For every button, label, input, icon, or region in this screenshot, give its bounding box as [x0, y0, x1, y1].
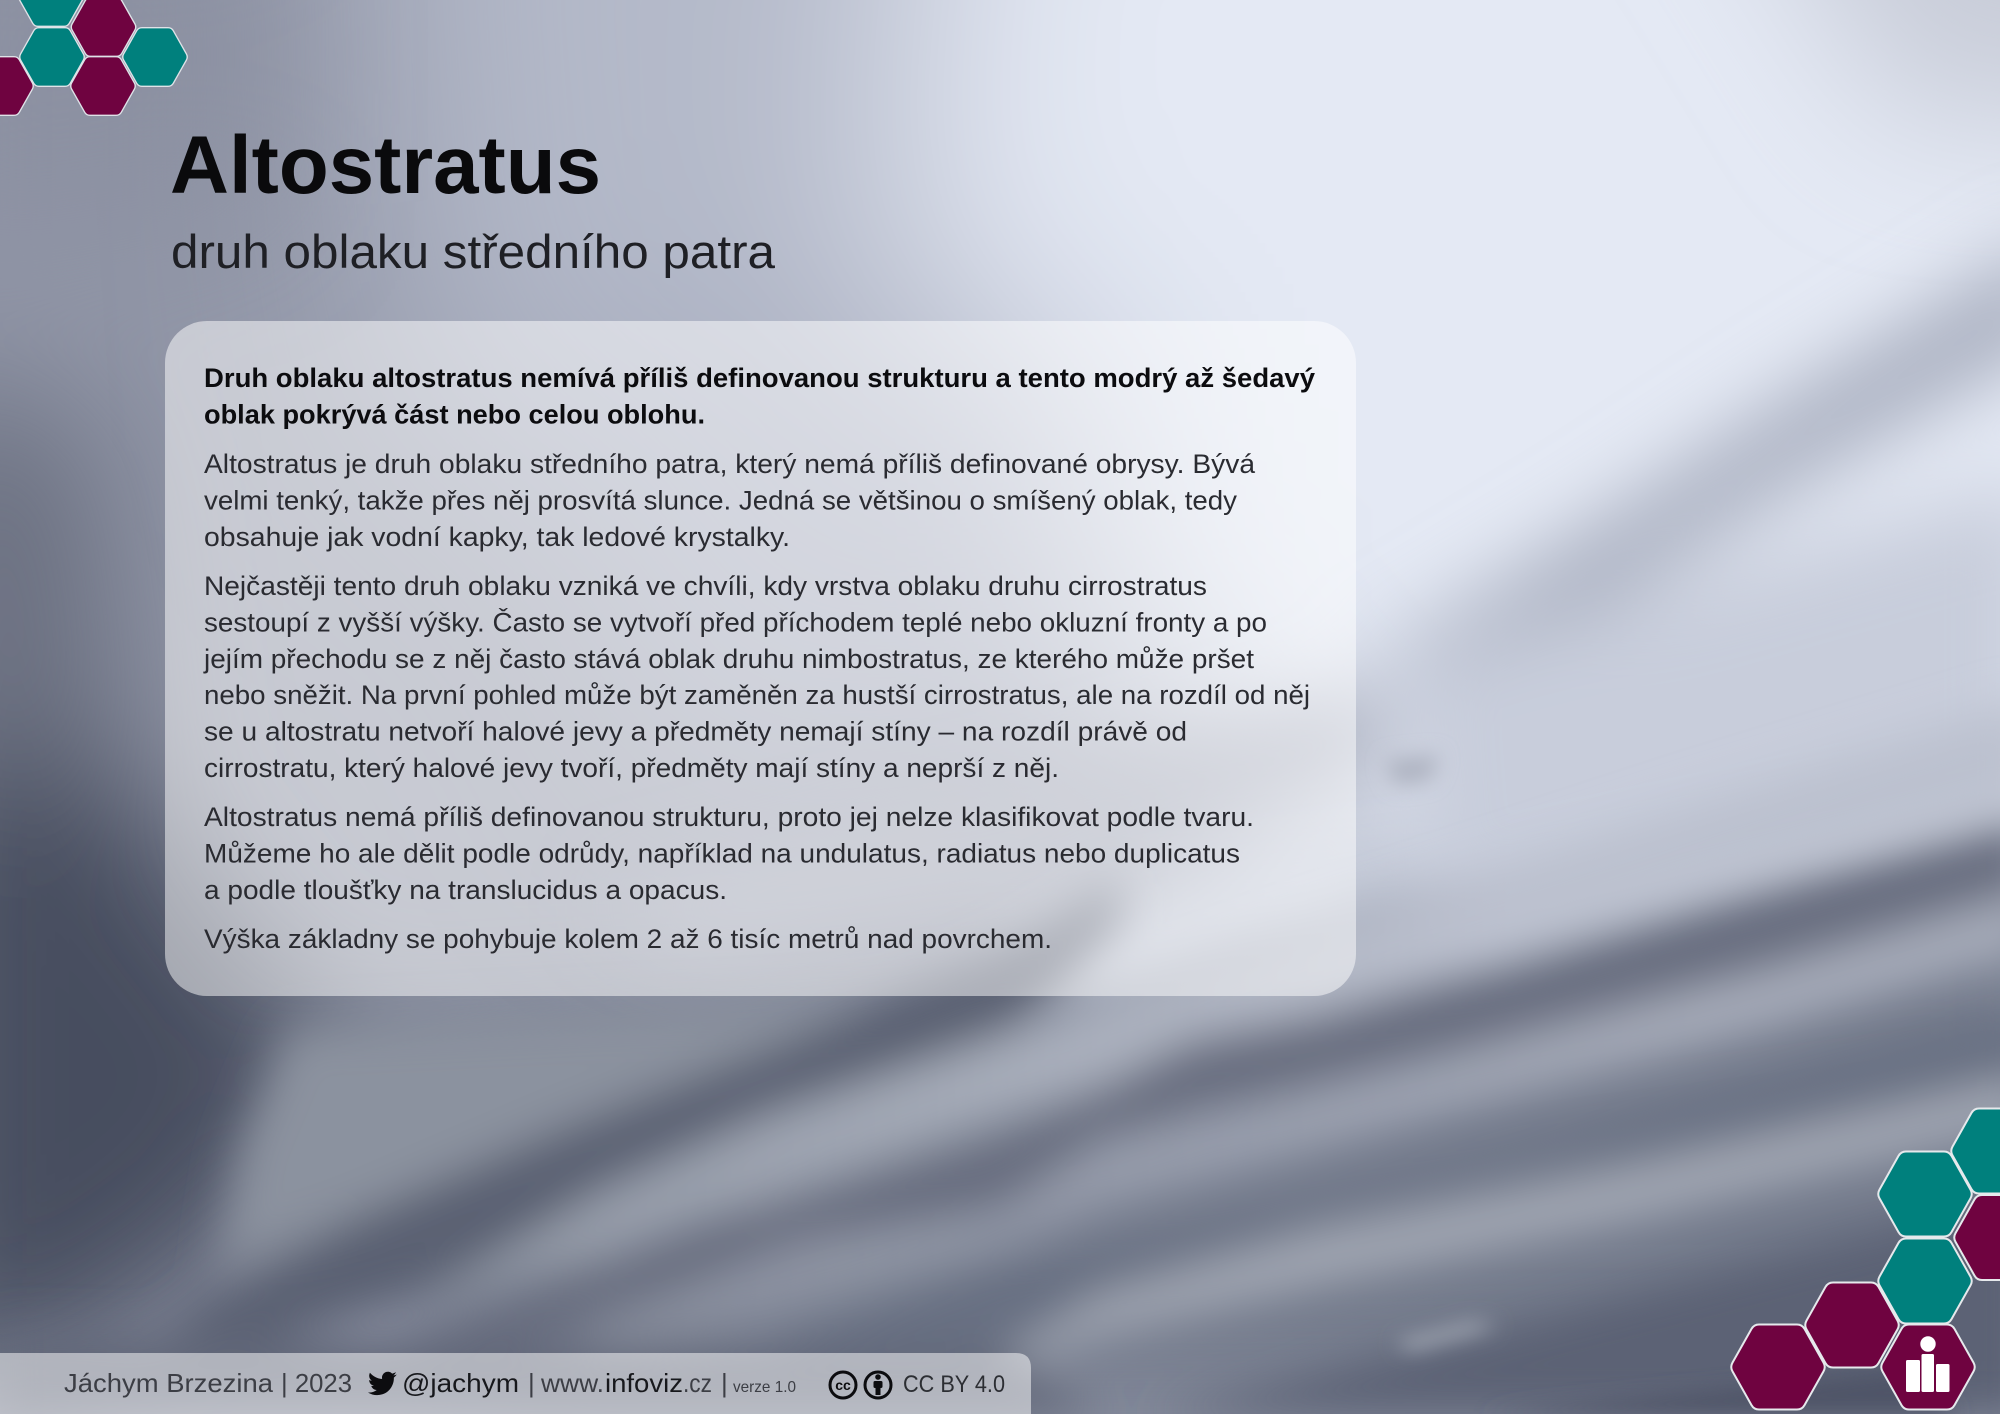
hexagon: teal middle	[20, 28, 84, 86]
paragraph 2: cirrostratu, který halové jevy tvoří, předměty mají stíny a neprší z něj.	[204, 753, 1059, 783]
panel background	[165, 321, 1356, 996]
footer website: infoviz	[605, 1368, 683, 1398]
subtitle: druh oblaku středního patra	[171, 225, 776, 278]
footer website	[540, 1368, 712, 1398]
paragraph 2: nebo sněžit. Na první pohled může být zaměněn za hustší cirrostratus, ale na rozdíl od něj	[204, 680, 1310, 710]
hexagon: purple with icon	[1881, 1324, 1975, 1410]
paragraph 1: Altostratus je druh oblaku středního patra, který nemá příliš definované obrysy. Bývá	[204, 449, 1256, 479]
light blob left	[220, 1000, 900, 1270]
footer separator and year: | 2023	[281, 1368, 352, 1398]
icon: creative commons	[830, 1372, 856, 1398]
paragraph 3: Můžeme ho ale dělit podle odrůdy, například na undulatus, radiatus nebo duplicatus	[204, 838, 1240, 868]
dark band C	[340, 820, 2000, 1360]
footer background	[0, 1353, 1031, 1414]
hexagon: purple left	[0, 57, 33, 115]
footer bar	[0, 1353, 1031, 1414]
paragraph 3: a podle tloušťky na translucidus a opacus.	[204, 875, 727, 905]
footer twitter handle: @jachym	[402, 1368, 519, 1398]
hexagon: purple bottom	[71, 57, 135, 115]
right grey wash	[1400, 480, 2000, 930]
footer website: .cz	[683, 1368, 712, 1398]
paragraph 2: se u altostratu netvoří halové jevy a předměty nemají stíny – na rozdíl právě od	[204, 717, 1187, 747]
footer version: verze 1.0	[733, 1379, 796, 1396]
hexagon: teal top	[19, 0, 83, 26]
hexagon: purple left	[1731, 1324, 1825, 1410]
panel: description	[165, 321, 1356, 996]
paragraph 3	[204, 802, 1254, 905]
panel: top-left hexagon cluster	[0, 0, 187, 115]
paragraph 2	[203, 571, 1310, 783]
paragraph 2: sestoupí z vyšší výšky. Často se vytvoří před příchodem teplé nebo okluzní fronty a po	[204, 606, 1267, 637]
footer license: CC BY 4.0	[903, 1371, 1005, 1398]
paragraph 1: velmi tenký, takže přes něj prosvítá slunce. Jedná se většinou o smíšený oblak, tedy	[204, 486, 1238, 516]
hexagon: purple middle	[1805, 1282, 1899, 1368]
dark band E	[700, 1010, 2000, 1375]
light band B	[420, 700, 2000, 1300]
hexagon: purple right	[1954, 1195, 2000, 1280]
bottom dark	[1150, 1190, 2000, 1414]
footer author: Jáchym Brzezina	[64, 1368, 274, 1398]
icon: person on bar chart	[1906, 1336, 1950, 1392]
lead paragraph: oblak pokrývá část nebo celou oblohu.	[204, 399, 705, 429]
hexagon: teal upper	[1878, 1152, 1972, 1236]
hexagon: purple top	[71, 0, 136, 56]
light band F	[950, 1075, 2000, 1390]
paragraph 4: Výška základny se pohybuje kolem 2 až 6 tisíc metrů nad povrchem.	[204, 924, 1052, 954]
hexagon: teal top right	[1951, 1108, 2000, 1194]
paragraph 1	[204, 449, 1256, 552]
paragraph 2: Nejčastěji tento druh oblaku vzniká ve chvíli, kdy vrstva oblaku druhu cirrostratus	[204, 571, 1207, 601]
icon: twitter bird	[368, 1372, 397, 1395]
light band D	[560, 890, 2000, 1360]
paragraph 1: obsahuje jak vodní kapky, tak ledové krystalky.	[204, 522, 790, 552]
dark band A	[150, 880, 1120, 1350]
paragraph 3: Altostratus nemá příliš definovanou strukturu, proto jej nelze klasifikovat podle tvaru.	[204, 802, 1254, 832]
icon: creative commons: cc	[835, 1377, 851, 1393]
footer separator: |	[721, 1368, 728, 1398]
hexagon: teal lower	[1878, 1238, 1972, 1324]
panel: bottom-right hexagon cluster	[1731, 1108, 2000, 1410]
hexagon: teal right	[123, 28, 187, 86]
title: Altostratus	[170, 120, 601, 211]
lead paragraph: Druh oblaku altostratus nemívá příliš definovanou strukturu a tento modrý až šedavý	[204, 363, 1315, 393]
lead paragraph	[204, 363, 1315, 429]
footer separator: |	[528, 1368, 535, 1398]
upper right band	[1340, 235, 2000, 680]
paragraph 2: jejím přechodu se z něj často stává oblak druhu nimbostratus, ze kterého může pršet	[203, 644, 1255, 674]
footer website: www.	[540, 1368, 604, 1398]
icon: attribution	[865, 1372, 891, 1398]
